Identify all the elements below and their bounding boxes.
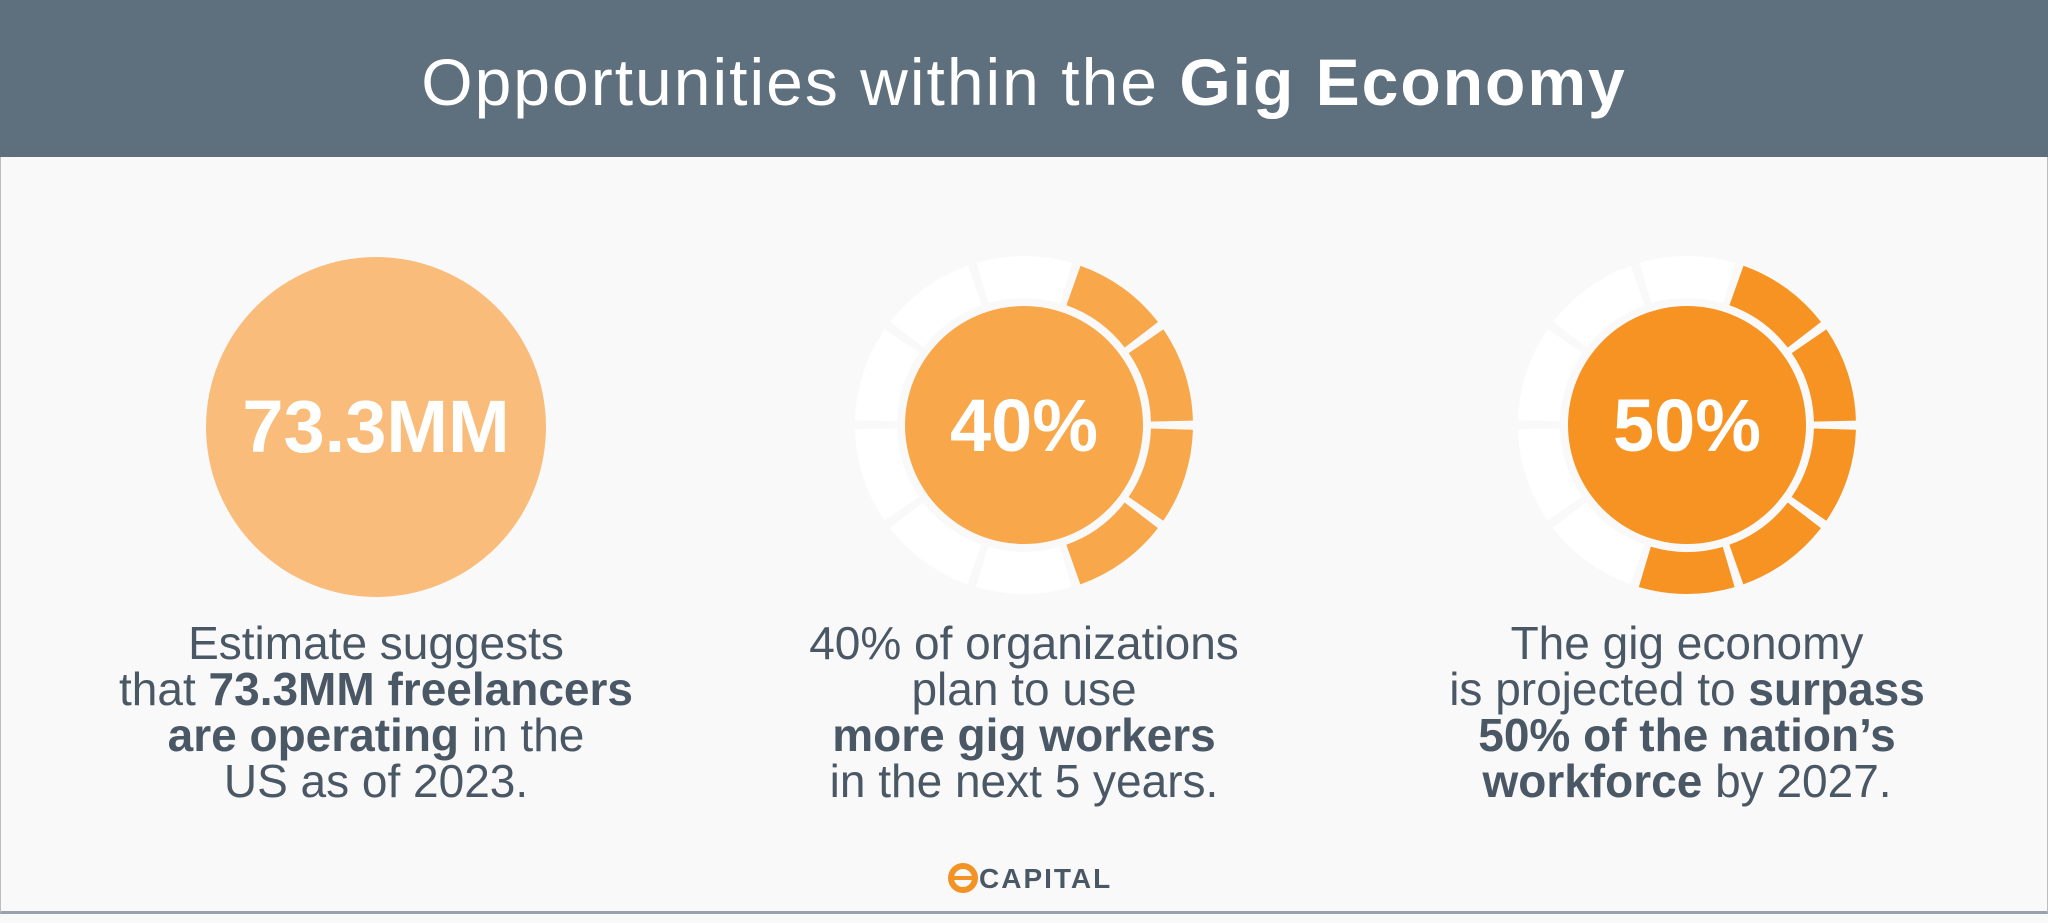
circle: 73.3MM: 73.3MM (242, 385, 510, 468)
text: organizations: more gig workers (832, 709, 1216, 761)
text: workforce: is projected to surpass 50% of the nation’s workforce by 2027. (1449, 663, 1925, 807)
donut: 50%: 50% (1613, 384, 1761, 467)
text: freelancers: US as of 2023. (224, 755, 528, 807)
header: title (0, 0, 2048, 157)
text: freelancers: Estimate suggests (188, 617, 564, 669)
donut: 40% (838, 239, 1210, 611)
text: workforce: The gig economy (1511, 617, 1863, 669)
text: organizations: plan to use (911, 663, 1137, 715)
donut: 50% (1501, 239, 1873, 611)
header: title: Opportunities within the Gig Economy (421, 45, 1627, 119)
text: organizations: in the next 5 years. (830, 755, 1218, 807)
text: organizations: 40% of organizations (809, 617, 1239, 669)
circle: 73.3MM (206, 257, 546, 597)
text: freelancers: that 73.3MM freelancers are operating in the (119, 663, 633, 761)
text: organizations (809, 617, 1239, 807)
donut: 40%: 40% (950, 384, 1098, 467)
text: freelancers (119, 617, 633, 807)
logo: eCapital: CAPITAL (979, 863, 1112, 894)
